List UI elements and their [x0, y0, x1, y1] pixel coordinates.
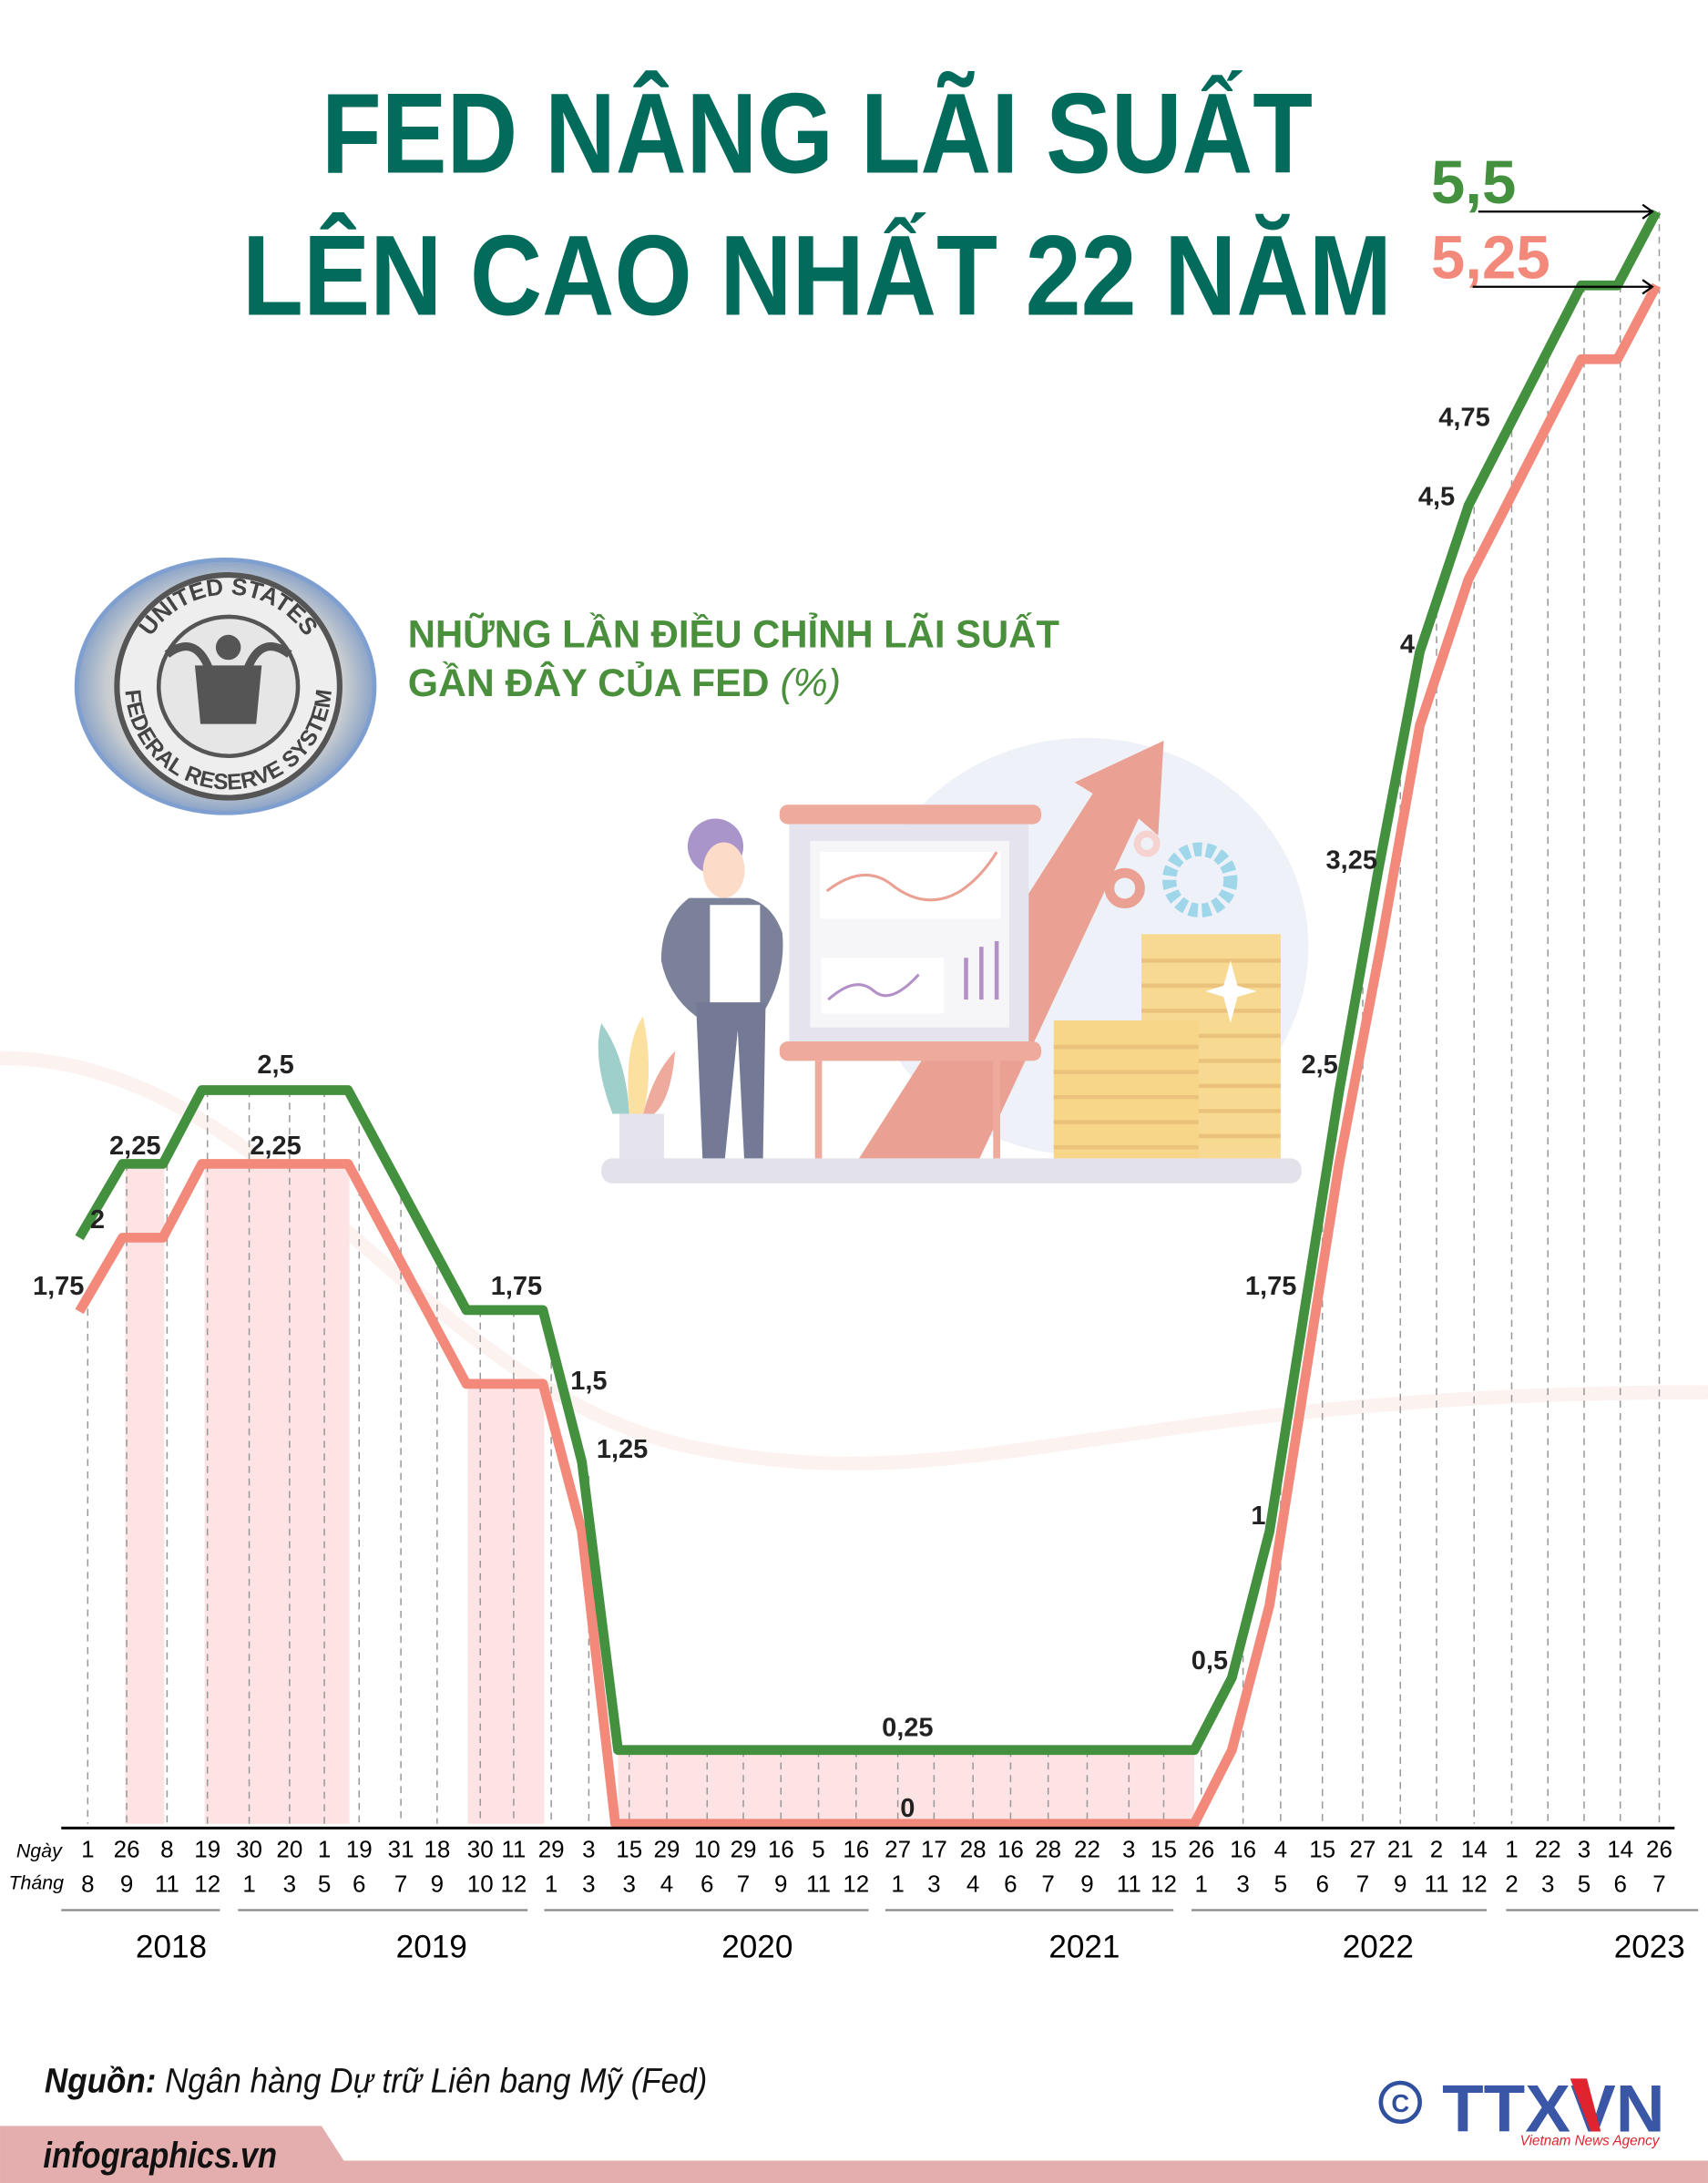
x axis: 30 — [467, 1835, 494, 1862]
x axis: 28 — [960, 1835, 987, 1862]
x axis: 26 — [1188, 1835, 1214, 1862]
x axis: 15 — [1151, 1835, 1177, 1862]
chart: value labels: 3,25 — [1326, 846, 1377, 876]
x axis: 4 — [1274, 1835, 1287, 1862]
x axis: 29 — [654, 1835, 680, 1862]
x axis: 11 — [501, 1835, 526, 1862]
x axis: 26 — [114, 1835, 140, 1862]
icon: Federal Reserve seal: UNITED STATES — [138, 579, 317, 634]
board — [780, 805, 1041, 825]
x axis: 5 — [1274, 1870, 1287, 1898]
chart: value labels: 1 — [1251, 1501, 1265, 1531]
x axis: 1 — [318, 1835, 331, 1862]
x axis: 1 — [545, 1870, 557, 1898]
x axis: 1 — [81, 1835, 95, 1862]
chart: value labels: 0,25 — [882, 1713, 934, 1742]
x axis: 7 — [1652, 1870, 1666, 1898]
x axis: 2018 — [136, 1929, 207, 1964]
x axis: Ngày — [16, 1840, 63, 1861]
chart: value labels: 4,75 — [1438, 404, 1490, 433]
x axis: 22 — [1535, 1835, 1561, 1862]
x axis: 3 — [283, 1870, 296, 1898]
chart: value labels: 0,5 — [1192, 1646, 1228, 1676]
x axis: 2019 — [396, 1929, 467, 1964]
x axis: 16 — [843, 1835, 869, 1862]
x axis: 17 — [921, 1835, 947, 1862]
subtitle: GẦN ĐÂY CỦA FED (%) — [408, 661, 841, 705]
x axis: 30 — [236, 1835, 262, 1862]
x axis: 21 — [1387, 1835, 1414, 1862]
x axis: 15 — [616, 1835, 642, 1862]
footer band — [0, 2126, 1708, 2183]
chart: lower bound line (red) — [79, 285, 1656, 1824]
x axis: 6 — [701, 1870, 714, 1898]
x axis: 1 — [1195, 1870, 1208, 1898]
x axis: 9 — [774, 1870, 788, 1898]
x axis: 1 — [1505, 1835, 1519, 1862]
x axis: 7 — [737, 1870, 750, 1898]
x axis: 29 — [731, 1835, 756, 1862]
x axis: 1 — [891, 1870, 905, 1898]
x axis: 14 — [1461, 1835, 1488, 1862]
x axis: 2021 — [1048, 1929, 1120, 1964]
x axis: 29 — [538, 1835, 565, 1862]
person — [688, 818, 743, 875]
x axis: 3 — [582, 1835, 596, 1862]
title: FED NÂNG LÃI SUẤT — [322, 68, 1313, 197]
subtitle — [408, 612, 1059, 705]
x axis: 5 — [318, 1870, 331, 1898]
x axis: 18 — [424, 1835, 450, 1862]
x axis: 11 — [1425, 1870, 1448, 1898]
x axis: 11 — [806, 1870, 831, 1898]
x axis: 8 — [160, 1835, 174, 1862]
base — [601, 1158, 1302, 1184]
x axis: 26 — [1646, 1835, 1672, 1862]
chart: upper bound line (green) — [79, 211, 1656, 1750]
chart: value labels: 2,25 — [109, 1132, 160, 1161]
x axis: 12 — [843, 1870, 869, 1898]
chart: shaded bands — [126, 1167, 1194, 1824]
x axis: 7 — [1356, 1870, 1369, 1898]
chart: value labels: 2,25 — [250, 1132, 302, 1161]
icon: Federal Reserve seal: FEDERAL RESERVE SYSTEM — [126, 690, 332, 790]
arrow — [852, 741, 1163, 1170]
logo: TTXVN: TTXVN — [1442, 2071, 1665, 2146]
chart: value labels: 2,5 — [1301, 1051, 1338, 1080]
callout: 5,5 and 5,25: 5,25 — [1431, 224, 1550, 292]
title: LÊN CAO NHẤT 22 NĂM — [242, 210, 1392, 339]
x axis: 10 — [467, 1870, 494, 1898]
x axis: 16 — [997, 1835, 1024, 1862]
x axis: 11 — [1117, 1870, 1141, 1898]
chart: value labels: 1,25 — [597, 1435, 648, 1464]
illustration: analyst with chart, arrow, gears, coins — [598, 738, 1308, 1184]
x axis: 7 — [394, 1870, 407, 1898]
x axis: 3 — [1236, 1870, 1250, 1898]
background faint decorations — [0, 1058, 1708, 1463]
logo: TTXVN: Vietnam News Agency — [1520, 2134, 1661, 2149]
x axis: 12 — [500, 1870, 527, 1898]
callout: 5,5 and 5,25: 5,5 — [1431, 149, 1516, 217]
gears — [1170, 849, 1231, 910]
source: Nguồn: Ngân hàng Dự trữ Liên bang Mỹ (Fed) — [45, 2062, 707, 2101]
x axis: Tháng — [8, 1872, 64, 1894]
x axis: 3 — [622, 1870, 636, 1898]
x axis: 14 — [1607, 1835, 1633, 1862]
x axis: 11 — [155, 1870, 179, 1898]
x axis: 9 — [431, 1870, 444, 1898]
x axis: 12 — [1461, 1870, 1488, 1898]
chart: value labels — [33, 404, 1490, 1823]
chart: dashed guide lines — [87, 211, 1659, 1824]
chart: value labels: 2,5 — [257, 1051, 294, 1080]
footer band: infographics.vn — [43, 2136, 277, 2176]
x axis: 15 — [1309, 1835, 1335, 1862]
x axis: 28 — [1035, 1835, 1061, 1862]
x axis: 4 — [967, 1870, 979, 1898]
x axis: 12 — [194, 1870, 220, 1898]
x axis — [8, 1828, 1698, 1964]
chart: value labels: 1,75 — [1245, 1272, 1296, 1301]
x axis: 1 — [242, 1870, 256, 1898]
x axis: 5 — [1578, 1870, 1590, 1898]
x axis: 2 — [1505, 1870, 1519, 1898]
x axis: 16 — [768, 1835, 794, 1862]
x axis: 3 — [582, 1870, 596, 1898]
plant — [598, 1023, 629, 1113]
x axis: 12 — [1151, 1870, 1177, 1898]
x axis: 3 — [1122, 1835, 1136, 1862]
x axis: 6 — [353, 1870, 366, 1898]
x axis: 2020 — [721, 1929, 793, 1964]
x axis: 3 — [1578, 1835, 1590, 1862]
callout: 5,5 and 5,25 — [1431, 149, 1652, 293]
x axis: 2022 — [1343, 1929, 1414, 1964]
x axis: 8 — [81, 1870, 95, 1898]
x axis: 2023 — [1614, 1929, 1685, 1964]
logo: TTXVN: C — [1391, 2089, 1409, 2117]
x axis: 27 — [885, 1835, 911, 1862]
subtitle: NHỮNG LẦN ĐIỀU CHỈNH LÃI SUẤT — [408, 612, 1059, 657]
x axis: 19 — [194, 1835, 220, 1862]
chart: value labels: 1,75 — [33, 1272, 84, 1301]
chart: value labels: 4 — [1400, 630, 1415, 660]
icon: Federal Reserve seal — [75, 558, 377, 815]
x axis: 19 — [346, 1835, 373, 1862]
x axis: 9 — [120, 1870, 133, 1898]
x axis: 6 — [1004, 1870, 1018, 1898]
x axis: 31 — [388, 1835, 414, 1862]
x axis: 4 — [660, 1870, 673, 1898]
chart: value labels: 4,5 — [1418, 483, 1455, 512]
x axis: 22 — [1074, 1835, 1100, 1862]
x axis: 6 — [1315, 1870, 1329, 1898]
title — [242, 68, 1392, 339]
x axis: 27 — [1350, 1835, 1376, 1862]
chart: value labels: 2 — [90, 1205, 105, 1235]
x axis: 3 — [927, 1870, 941, 1898]
chart: value labels: 1,75 — [491, 1272, 542, 1301]
x axis: 6 — [1613, 1870, 1627, 1898]
x axis: 2 — [1430, 1835, 1443, 1862]
x axis: 3 — [1541, 1870, 1554, 1898]
x axis: 20 — [276, 1835, 302, 1862]
chart: value labels: 0 — [900, 1794, 915, 1823]
chart: value labels: 1,5 — [570, 1367, 608, 1396]
x axis: 9 — [1080, 1870, 1094, 1898]
coins — [1141, 934, 1281, 1163]
x axis: 5 — [812, 1835, 825, 1862]
x axis: 16 — [1230, 1835, 1256, 1862]
x axis: 10 — [694, 1835, 721, 1862]
x axis: 7 — [1041, 1870, 1055, 1898]
x axis: 9 — [1394, 1870, 1406, 1898]
